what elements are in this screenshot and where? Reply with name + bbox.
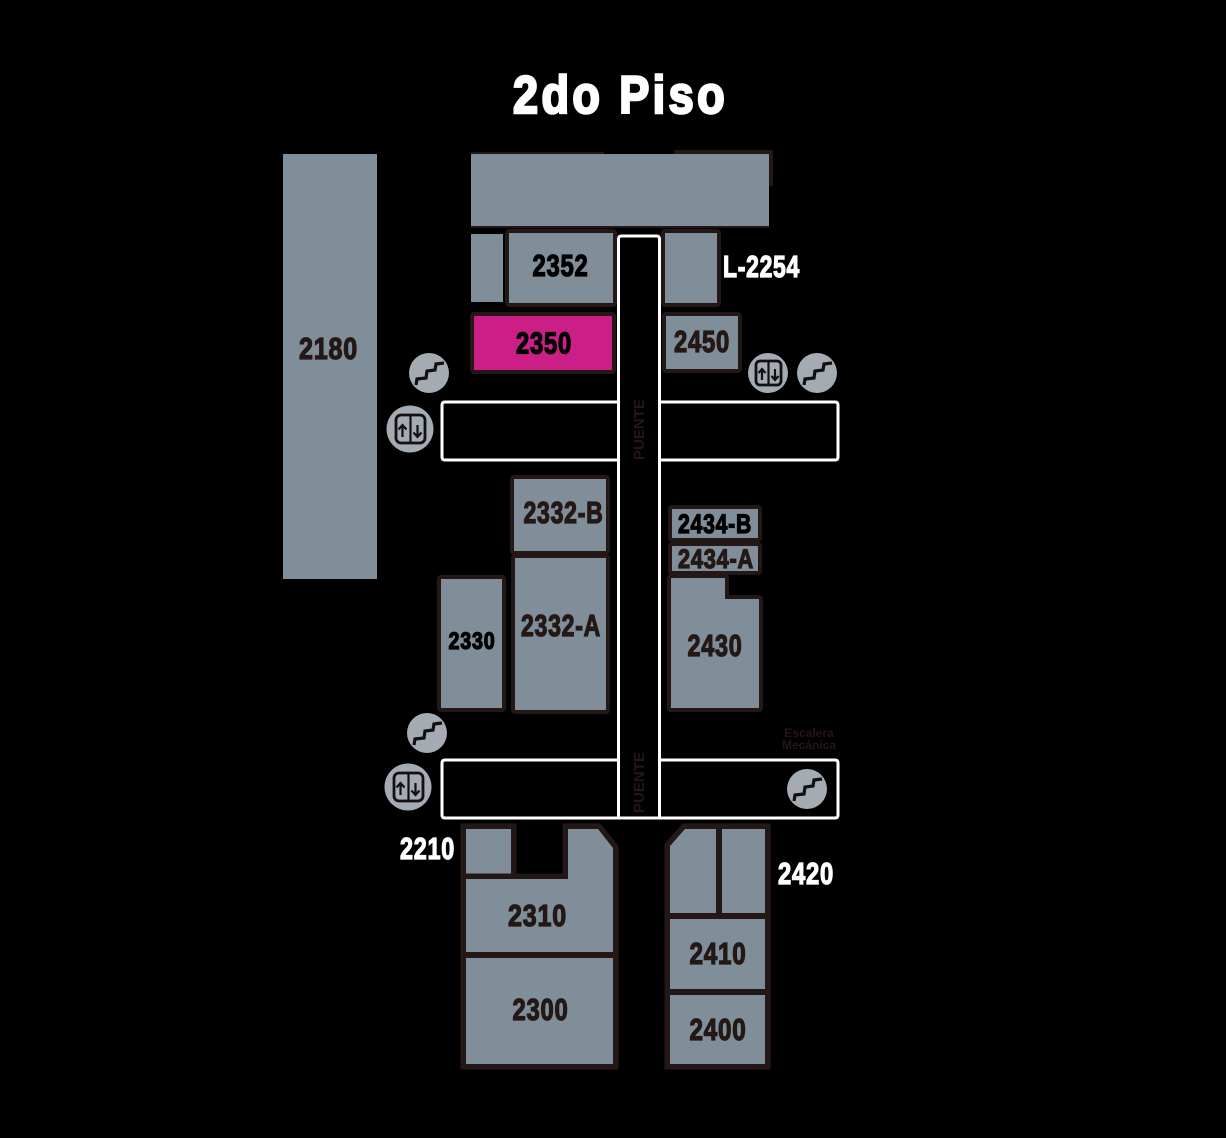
store 2210 — [400, 829, 511, 874]
upper corridor — [442, 402, 838, 460]
store 2410 — [670, 919, 765, 989]
store 2430: 2430 — [688, 628, 742, 663]
store 2400: 2400 — [690, 1012, 746, 1047]
icon: escalator lower left — [407, 713, 447, 753]
store 2420 — [670, 829, 834, 913]
store 2332-A: 2332-A — [521, 608, 601, 643]
store 2330 — [441, 579, 502, 708]
bridge label lower: PUENTE — [631, 752, 648, 813]
store 2434-B: 2434-B — [678, 509, 752, 539]
icon: elevator upper right — [748, 353, 788, 393]
store 2430 — [671, 578, 759, 708]
store 2310: 2310 — [508, 898, 567, 933]
store 2352 — [509, 233, 613, 303]
store 2400 — [670, 995, 765, 1064]
store 2350 highlighted: 2350 — [516, 326, 572, 360]
lower corridor — [442, 760, 838, 818]
store 2300: 2300 — [512, 992, 568, 1027]
store 2352: 2352 — [532, 248, 588, 283]
store 2180 — [283, 154, 377, 579]
icon: escalator upper left — [409, 353, 449, 393]
top unlabelled store — [471, 150, 773, 228]
title: 2do Piso — [513, 66, 728, 125]
store 2210: 2210 — [400, 831, 455, 866]
store 2450 — [666, 316, 738, 369]
escalator caption: Escalera — [784, 726, 834, 740]
store 2350 highlighted — [474, 316, 612, 370]
small unlabelled store — [471, 234, 503, 302]
bridge label upper: PUENTE — [631, 399, 648, 460]
store 2332-A — [515, 558, 606, 710]
escalator caption: Mecánica — [782, 738, 836, 752]
store 2332-B — [514, 479, 606, 551]
store L-2254: L-2254 — [723, 249, 800, 284]
store L-2254 — [665, 233, 800, 303]
store 2434-A: 2434-A — [678, 544, 754, 574]
store 2180: 2180 — [299, 331, 358, 366]
icon: escalator lower right — [787, 769, 827, 809]
store 2332-B: 2332-B — [524, 495, 604, 530]
store 2420: 2420 — [778, 856, 834, 891]
icon: elevator lower left — [384, 764, 432, 810]
store 2300 — [466, 958, 613, 1064]
icon: elevator upper left — [386, 406, 434, 452]
store 2410: 2410 — [690, 936, 746, 971]
bridge walkway — [618, 236, 660, 818]
store 2450: 2450 — [674, 324, 730, 359]
icon: escalator upper right — [797, 353, 837, 393]
store 2330: 2330 — [448, 628, 496, 655]
store 2310 — [466, 829, 613, 952]
